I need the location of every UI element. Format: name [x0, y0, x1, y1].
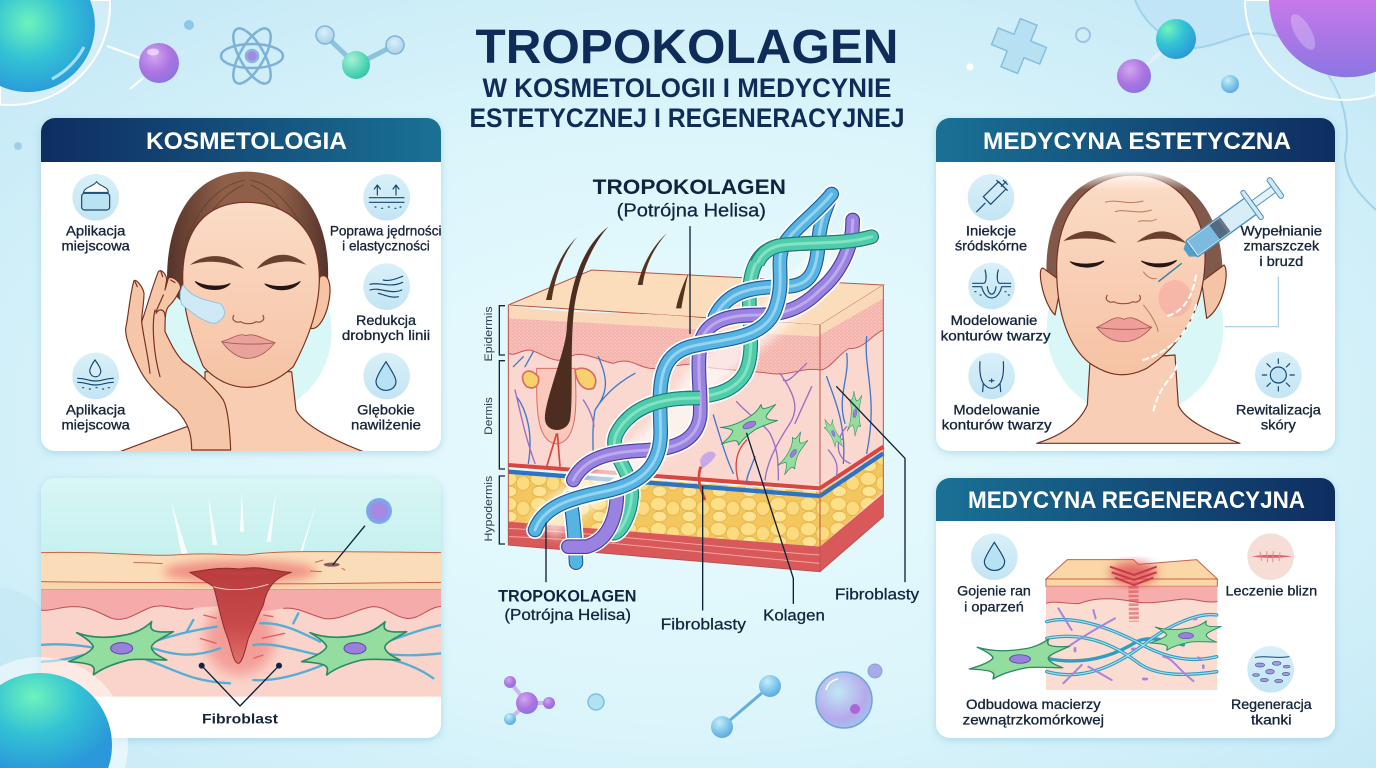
bottom molecule blue: [711, 675, 781, 738]
injection mark and ball: [133, 498, 392, 572]
item: leczenie blizn: Leczenie blizn: [1225, 583, 1317, 599]
label: tropokolagen top: TROPOKOLAGEN: [593, 175, 786, 199]
strand: green overlaps: [627, 237, 872, 420]
item: głębokie nawilżenie: Glębokie: [357, 401, 415, 417]
label: tropokolagen top: [593, 175, 786, 221]
skin block: [508, 270, 883, 572]
top-right sphere with ring: [1245, 0, 1376, 100]
label: tropokolagen bottom: TROPOKOLAGEN: [498, 587, 636, 606]
central diagram: skin cross-section with triple helix: [483, 175, 919, 633]
label: fibroblast: Fibroblast: [202, 710, 278, 726]
wound: [190, 568, 292, 663]
title: [470, 21, 904, 133]
panel header: MEDYCYNA ESTETYCZNA: [983, 128, 1291, 155]
strand: green: [613, 237, 872, 533]
panel: kosmetologia: [41, 118, 441, 452]
layer labels: Epidermis: [483, 306, 495, 361]
item: modelowanie konturów twarzy 1: [941, 263, 1051, 343]
collagen fibres: [40, 613, 442, 683]
item: odbudowa macierzy: [963, 696, 1104, 727]
panel: medycyna estetyczna: [936, 118, 1335, 451]
fibroblast left: [969, 639, 1069, 679]
panel header: [936, 478, 1335, 521]
item: iniekcje śródskórne: śródskórne: [955, 238, 1027, 254]
illustration: skin repair block: [1046, 560, 1217, 690]
illustration: face with syringe: [1037, 170, 1288, 443]
hairs and follicle: [523, 227, 688, 467]
item: odbudowa macierzy: zewnątrzkomórkowej: [963, 711, 1104, 727]
nose and lips: [233, 315, 264, 324]
panel: wound healing: [40, 475, 443, 740]
item: wypełnianie zmarszczek: zmarszczek: [1243, 238, 1320, 254]
layer labels: Hypodermis: [483, 475, 495, 541]
title: ESTETYCZNEJ I REGENERACYJNEJ: [470, 103, 904, 133]
eyes and brows: [190, 255, 307, 290]
item: głębokie nawilżenie: nawilżenie: [351, 417, 421, 433]
item: głębokie nawilżenie: [351, 353, 421, 433]
item: regeneracja tkanki: tkanki: [1251, 711, 1292, 727]
icon: plus: [985, 12, 1053, 80]
fibroblast right: [1150, 621, 1221, 650]
label: fibroblasty: Fibroblasty: [661, 616, 746, 633]
panel header: KOSMETOLOGIA: [146, 128, 347, 155]
item: aplikacja miejscowa 2: [61, 353, 130, 433]
item: poprawa jędrności: [330, 174, 441, 254]
item: gojenie ran: i oparzeń: [964, 599, 1024, 615]
item: redukcja drobnych linii: Redukcja: [356, 312, 416, 328]
triple helix: [535, 194, 872, 563]
syringe: [1158, 173, 1288, 282]
panel header: [936, 118, 1335, 162]
icons and labels: [61, 174, 441, 433]
item: modelowanie konturów twarzy 2: Modelowanie: [953, 401, 1040, 417]
label: tropokolagen bottom: [498, 587, 636, 624]
item: wypełnianie zmarszczek: Wypełnianie: [1240, 223, 1322, 239]
item: iniekcje śródskórne: [955, 174, 1027, 254]
fibroblasts: [68, 622, 173, 675]
icon: atom: [221, 23, 283, 89]
layer brackets: [499, 306, 505, 544]
item: poprawa jędrności: i elastyczności: [342, 238, 430, 254]
item: leczenie blizn: [1225, 533, 1317, 599]
strand: blue lower and upper: [570, 194, 832, 563]
light rays: [172, 493, 316, 554]
item: iniekcje śródskórne: Iniekcje: [966, 223, 1016, 239]
blood vessels: [513, 337, 871, 482]
top-left sphere with ring: [0, 0, 110, 105]
item: odbudowa macierzy: Odbudowa macierzy: [966, 696, 1101, 712]
bottom-left sphere: [0, 657, 128, 768]
item: gojenie ran: [957, 533, 1031, 615]
white glow around helix: [543, 257, 830, 530]
eyes and brows: [1063, 231, 1187, 267]
fibroblasts: [699, 391, 867, 500]
item: modelowanie konturów twarzy 2: [942, 353, 1052, 433]
label: tropokolagen top: (Potrójna Helisa): [617, 200, 766, 221]
green molecule: [316, 26, 404, 79]
item: modelowanie konturów twarzy 1: konturów twarzy: [941, 327, 1051, 343]
item: gojenie ran: Gojenie ran: [957, 583, 1031, 599]
treatment guide dashes: [1143, 276, 1196, 412]
connector: [1225, 277, 1278, 327]
item: modelowanie konturów twarzy 1: Modelowanie: [951, 312, 1038, 328]
label: fibroblast: [199, 663, 282, 726]
item: aplikacja miejscowa 2: Aplikacja: [66, 401, 126, 417]
layer labels: [483, 306, 495, 541]
item: aplikacja miejscowa 1: Aplikacja: [66, 223, 126, 239]
item: poprawa jędrności: Poprawa jędrności: [330, 223, 441, 239]
illustration: woman applying patch: [120, 172, 363, 452]
item: redukcja drobnych linii: [342, 263, 430, 343]
item: regeneracja tkanki: [1231, 646, 1312, 727]
skin layers: [40, 552, 443, 698]
item: redukcja drobnych linii: drobnych linii: [342, 327, 430, 343]
hand: [126, 271, 231, 450]
bubble: [816, 664, 882, 728]
panel header: MEDYCYNA REGENERACYJNA: [968, 487, 1305, 514]
leader lines: [546, 227, 905, 610]
icon: under-eye patch: [180, 285, 225, 323]
item: rewitalizacja skóry: skóry: [1261, 417, 1296, 433]
label: kolagen: Kolagen: [763, 608, 825, 625]
item: aplikacja miejscowa 1: [61, 174, 130, 254]
label: fibroblasty right: Fibroblasty: [835, 586, 919, 603]
collagen fibres: [1047, 615, 1217, 675]
icons and labels: [941, 174, 1322, 433]
title: W KOSMETOLOGII I MEDYCYNIE: [482, 73, 892, 103]
item: aplikacja miejscowa 2: miejscowa: [61, 417, 130, 433]
item: wypełnianie zmarszczek: i bruzd: [1259, 253, 1303, 269]
right molecule: [1117, 19, 1239, 93]
item: rewitalizacja skóry: [1236, 352, 1321, 433]
layer labels: Dermis: [483, 397, 495, 435]
item: aplikacja miejscowa 1: miejscowa: [61, 238, 130, 254]
bottom molecule purple: [504, 676, 555, 725]
item: wypełnianie zmarszczek: [1240, 225, 1322, 266]
strand: blue main: [535, 194, 832, 530]
item: modelowanie konturów twarzy 2: konturów twarzy: [942, 417, 1052, 433]
item: rewitalizacja skóry: Rewitalizacja: [1236, 401, 1321, 417]
purple molecule: [139, 43, 179, 83]
label: tropokolagen bottom: (Potrójna Helisa): [504, 607, 631, 624]
strand: purple: [568, 220, 853, 547]
item: regeneracja tkanki: Regeneracja: [1231, 696, 1312, 712]
panel header: [41, 118, 441, 162]
title: TROPOKOLAGEN: [476, 21, 898, 74]
panel: medycyna regeneracyjna: [936, 478, 1335, 738]
